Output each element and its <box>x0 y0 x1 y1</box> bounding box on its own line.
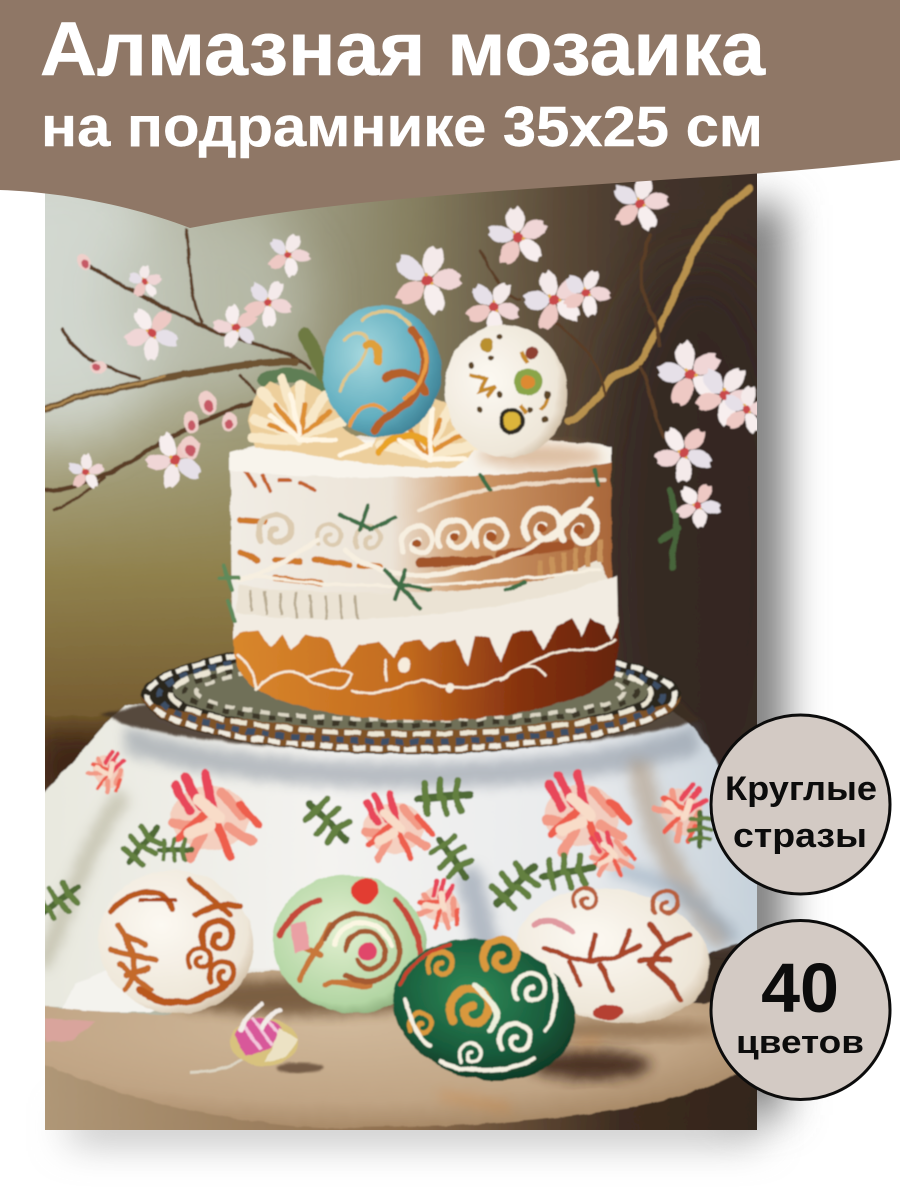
badge: round rhinestones: стразы <box>733 817 867 855</box>
orange layer flecks <box>240 470 570 583</box>
floral print <box>34 748 720 937</box>
cherry branches <box>45 188 750 568</box>
bottom left orange swirl egg <box>106 874 254 1014</box>
decorated white egg <box>444 324 568 458</box>
cherry blossoms <box>67 169 776 532</box>
wooden table <box>35 970 767 1140</box>
cream flowers on cake <box>248 378 478 468</box>
white icing drips <box>233 575 618 667</box>
cake middle layers <box>230 435 612 625</box>
badge: round rhinestones <box>711 715 890 894</box>
cloth shadow under plate <box>125 725 700 788</box>
bottom right pink egg <box>516 885 711 1024</box>
green sprigs on cake <box>220 470 598 620</box>
small flower bud on table <box>190 1005 298 1073</box>
header banner <box>0 0 900 228</box>
cake crumb base <box>232 618 620 722</box>
badge: 40 colours <box>711 920 890 1100</box>
bottom green egg <box>392 934 576 1082</box>
badge: 40 colours: 40 <box>761 949 839 1027</box>
table shadows under eggs <box>160 979 440 1015</box>
canvas drop shadow <box>70 205 785 1139</box>
cake top icing <box>229 438 611 478</box>
bottom mint egg <box>272 874 428 1014</box>
icing lines on base <box>238 640 615 693</box>
painting background wall <box>45 174 757 1016</box>
icing scrollwork <box>238 480 605 586</box>
badge: 40 colours: цветов <box>736 1024 864 1060</box>
cake <box>220 435 618 720</box>
painting: Easter cake and eggs <box>45 174 757 1130</box>
subtitle: на подрамнике 35х25 см <box>41 95 763 159</box>
decorated blue egg <box>323 305 441 437</box>
cloth fold shadows <box>45 770 730 960</box>
lace plate <box>140 652 682 756</box>
ruffled cream band <box>235 560 612 625</box>
title: Алмазная мозаика <box>40 7 766 92</box>
tablecloth <box>34 700 767 1012</box>
badge: round rhinestones: Круглые <box>725 770 877 808</box>
